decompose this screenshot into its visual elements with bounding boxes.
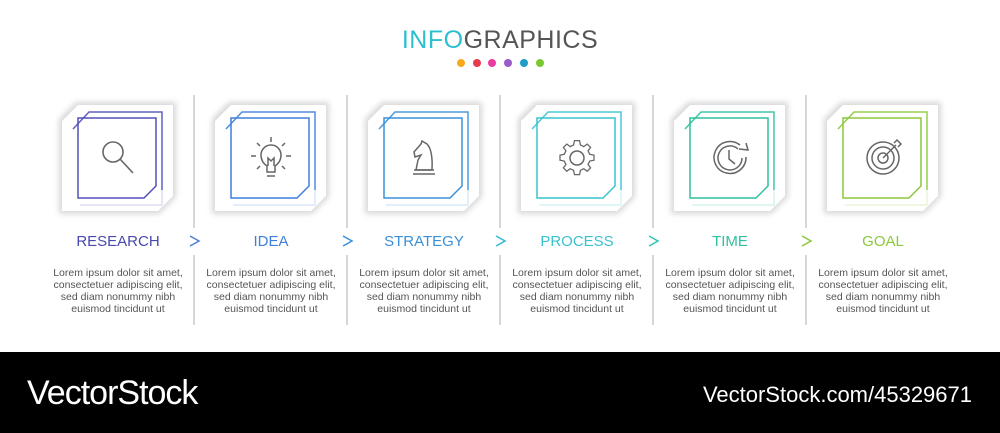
color dots <box>457 59 544 67</box>
title: INFOGRAPHICS <box>402 26 598 54</box>
body texts: Lorem ipsum dolor sit amet, <box>359 267 489 279</box>
body texts: consectetuer adipiscing elit, <box>54 279 182 291</box>
body texts: consectetuer adipiscing elit, <box>512 279 642 291</box>
arrows <box>190 236 811 246</box>
dividers <box>194 95 806 325</box>
icon: chess knight <box>413 141 435 174</box>
panel: process <box>518 102 635 214</box>
panel: goal <box>824 102 941 214</box>
body texts: sed diam nonummy nibh <box>826 291 940 303</box>
panel: research <box>59 102 176 214</box>
icon: target <box>867 140 901 174</box>
body texts: consectetuer adipiscing elit, <box>818 279 948 291</box>
body texts: sed diam nonummy nibh <box>367 291 481 303</box>
body texts: euismod tincidunt ut <box>530 303 624 315</box>
body texts: sed diam nonummy nibh <box>61 291 175 303</box>
headings: RESEARCH <box>76 233 160 250</box>
panel: time <box>671 102 788 214</box>
body texts: Lorem ipsum dolor sit amet, <box>53 267 183 279</box>
headings <box>76 233 904 250</box>
headings: PROCESS <box>540 233 614 250</box>
body texts <box>53 267 948 315</box>
headings: STRATEGY <box>384 233 464 250</box>
body texts: euismod tincidunt ut <box>224 303 318 315</box>
footer band: VectorStock.com/45329671 <box>703 382 972 407</box>
body texts: sed diam nonummy nibh <box>673 291 787 303</box>
body texts: euismod tincidunt ut <box>377 303 471 315</box>
icon: magnifier <box>103 142 133 173</box>
footer band <box>0 352 1000 433</box>
footer band: VectorStock <box>27 374 199 412</box>
body texts: sed diam nonummy nibh <box>520 291 634 303</box>
frame <box>73 112 162 205</box>
icon: clock refresh <box>714 141 748 173</box>
body texts: euismod tincidunt ut <box>836 303 930 315</box>
body texts: Lorem ipsum dolor sit amet, <box>665 267 795 279</box>
body texts: euismod tincidunt ut <box>683 303 777 315</box>
body texts: sed diam nonummy nibh <box>214 291 328 303</box>
body texts: consectetuer adipiscing elit, <box>206 279 336 291</box>
body texts: Lorem ipsum dolor sit amet, <box>818 267 948 279</box>
body texts: consectetuer adipiscing elit, <box>666 279 794 291</box>
body texts: Lorem ipsum dolor sit amet, <box>206 267 336 279</box>
icon: gear <box>560 141 594 175</box>
headings: IDEA <box>253 233 289 250</box>
body texts: euismod tincidunt ut <box>71 303 165 315</box>
icon: bulb <box>251 137 291 176</box>
headings: TIME <box>712 233 748 250</box>
body texts: consectetuer adipiscing elit, <box>360 279 488 291</box>
body texts: Lorem ipsum dolor sit amet, <box>512 267 642 279</box>
panel: idea <box>212 102 329 214</box>
headings: GOAL <box>862 233 904 250</box>
panel: strategy <box>365 102 482 214</box>
